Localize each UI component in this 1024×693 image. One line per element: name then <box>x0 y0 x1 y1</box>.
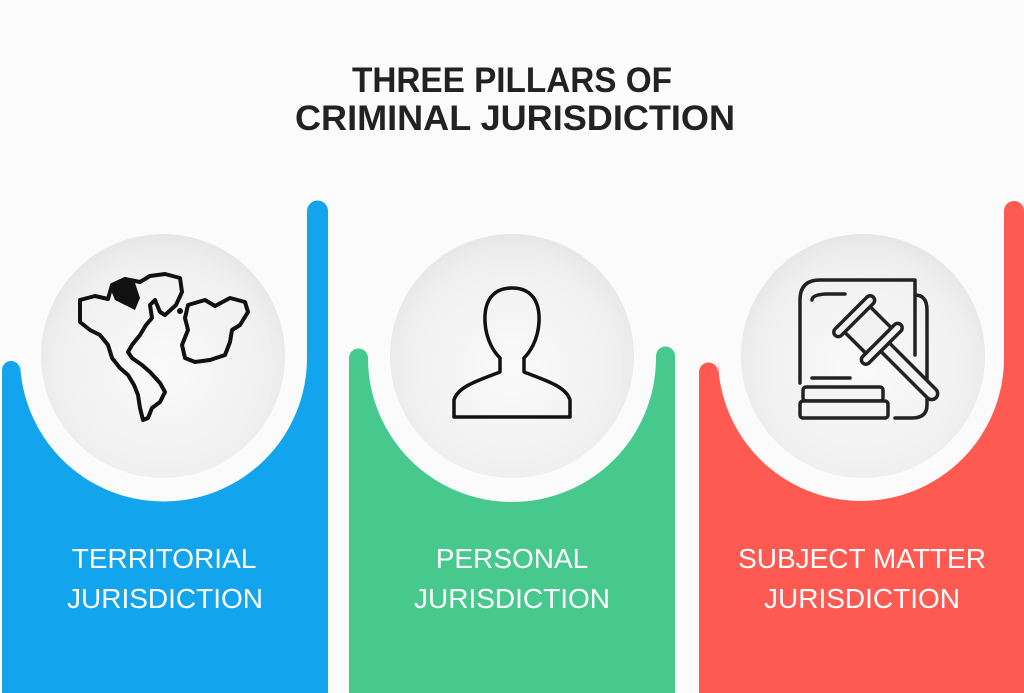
label: territorial: JURISDICTION <box>67 583 263 614</box>
label: subject matter: SUBJECT MATTER <box>738 543 986 574</box>
panel: territorial <box>2 200 328 693</box>
label: territorial <box>67 543 263 614</box>
label: territorial: TERRITORIAL <box>72 543 256 574</box>
icon: gavel and book <box>741 234 985 478</box>
panel: personal <box>349 234 675 693</box>
label: personal: PERSONAL <box>436 543 588 574</box>
panel: subject matter <box>699 201 1024 693</box>
title: THREE PILLARS OF <box>352 61 672 100</box>
label: subject matter: JURISDICTION <box>764 583 960 614</box>
icon: world map <box>41 234 285 478</box>
label: personal: JURISDICTION <box>414 583 610 614</box>
title: CRIMINAL JURISDICTION <box>295 99 735 138</box>
label: personal <box>414 543 610 614</box>
icon: person <box>390 234 634 478</box>
title <box>295 61 735 138</box>
label: subject matter <box>738 543 986 614</box>
